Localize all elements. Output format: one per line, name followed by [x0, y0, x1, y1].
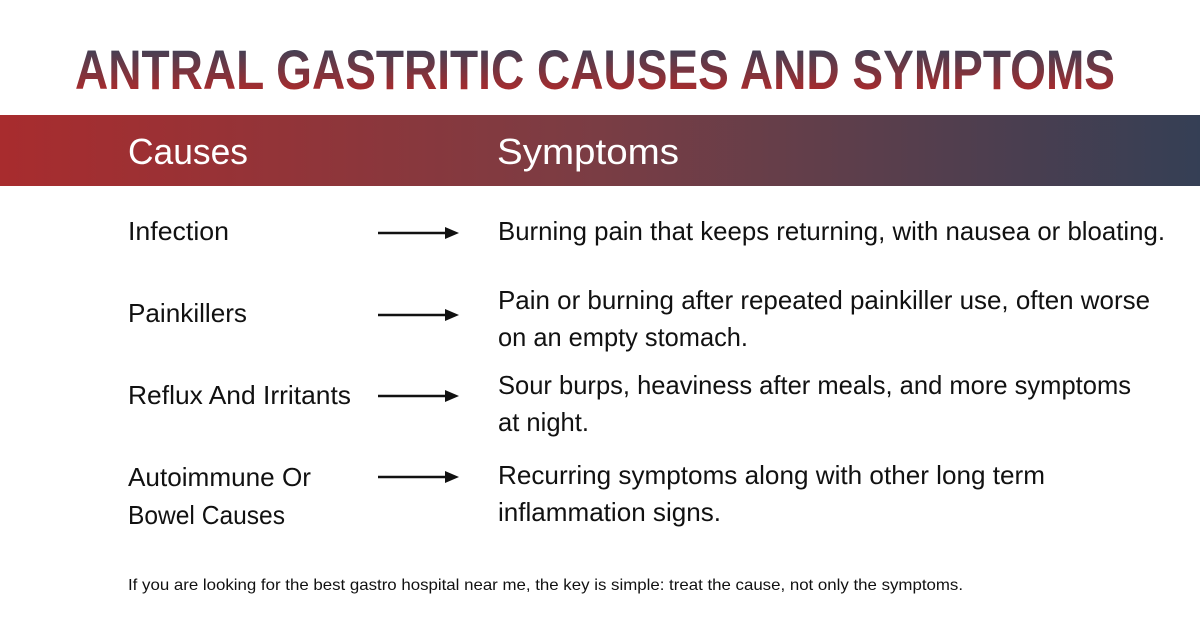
row: painkillers — [128, 285, 1150, 352]
row: autoimmune — [128, 460, 1045, 530]
heading: causes: Causes — [128, 131, 248, 172]
symptom text — [498, 285, 1150, 352]
row: reflux: Reflux And Irritants — [128, 380, 351, 410]
symptom text: inflammation signs. — [498, 497, 721, 527]
symptom text: at night. — [498, 407, 589, 437]
symptom text — [498, 370, 1131, 437]
symptom text: Sour burps, heaviness after meals, and more symptoms — [498, 370, 1131, 400]
header band — [0, 115, 1200, 186]
symptom text: Recurring symptoms along with other long term — [498, 460, 1045, 490]
footer note: If you are looking for the best gastro hospital near me, the key is simple: treat the cause, not only the symptoms. — [128, 577, 963, 594]
row: reflux — [128, 370, 1131, 437]
heading: symptoms: Symptoms — [497, 131, 679, 172]
symptom text: Burning pain that keeps returning, with nausea or bloating. — [498, 216, 1165, 246]
row: infection — [128, 216, 1165, 246]
symptom text — [498, 460, 1045, 527]
row: infection: Infection — [128, 216, 229, 246]
row: painkillers: Painkillers — [128, 298, 247, 328]
arrow — [378, 390, 459, 402]
symptom text: Pain or burning after repeated painkiller use, often worse — [498, 285, 1150, 315]
symptom text: on an empty stomach. — [498, 322, 748, 352]
arrow — [378, 227, 459, 239]
row: autoimmune: Autoimmune Or — [128, 462, 311, 492]
row: autoimmune: Bowel Causes — [128, 500, 285, 530]
arrow — [378, 471, 459, 483]
arrow — [378, 309, 459, 321]
